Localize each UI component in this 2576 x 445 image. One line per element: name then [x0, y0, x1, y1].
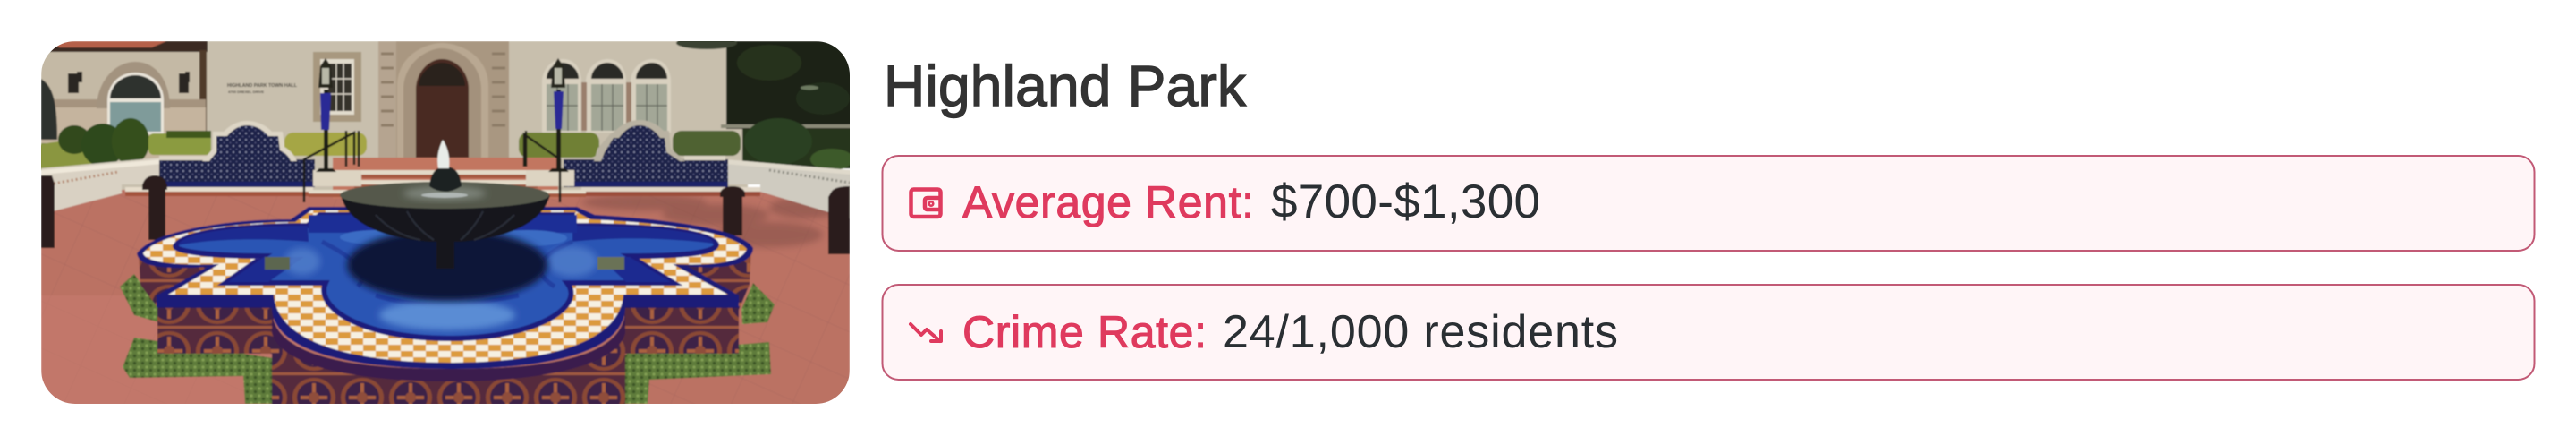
left arched window — [41, 62, 170, 140]
trees — [676, 37, 852, 129]
entrance steps — [309, 158, 586, 199]
facade lettering: HIGHLAND PARK TOWN HALL — [227, 83, 298, 89]
icon: wallet — [911, 190, 941, 217]
facade lettering — [227, 83, 298, 94]
handrails — [304, 131, 560, 202]
building facade — [41, 41, 748, 193]
title: Highland Park — [884, 54, 1247, 118]
panel: average rent — [882, 156, 2535, 251]
icon: trending down arrow — [911, 324, 941, 341]
bollards — [41, 175, 850, 254]
label: average rent: Average Rent: — [962, 177, 1254, 227]
fountain walls — [139, 248, 751, 405]
shrubs — [27, 118, 853, 174]
panel: crime rate — [882, 285, 2535, 380]
fountain tiled rim — [137, 207, 753, 369]
label: crime rate: Crime Rate: — [962, 307, 1207, 357]
fountain basin water — [175, 215, 716, 338]
value: crime figure: 24/1,000 residents — [1223, 306, 1618, 358]
wall lanterns — [68, 72, 190, 93]
neighborhood card — [41, 41, 2535, 404]
grass — [120, 274, 775, 404]
town hall door — [416, 59, 469, 159]
tiled benches — [125, 120, 760, 196]
right windows — [542, 59, 671, 133]
photo: Highland Park town hall fountain — [27, 37, 853, 405]
facade lettering: 4700 DREXEL DRIVE — [228, 90, 264, 94]
courtyard pavement — [41, 190, 850, 405]
low side walls — [41, 158, 852, 218]
value: rent range: $700-$1,300 — [1271, 175, 1540, 228]
central window — [313, 52, 361, 122]
lamp posts with ribbons — [316, 58, 569, 172]
fountain bowl and jet — [340, 140, 550, 269]
